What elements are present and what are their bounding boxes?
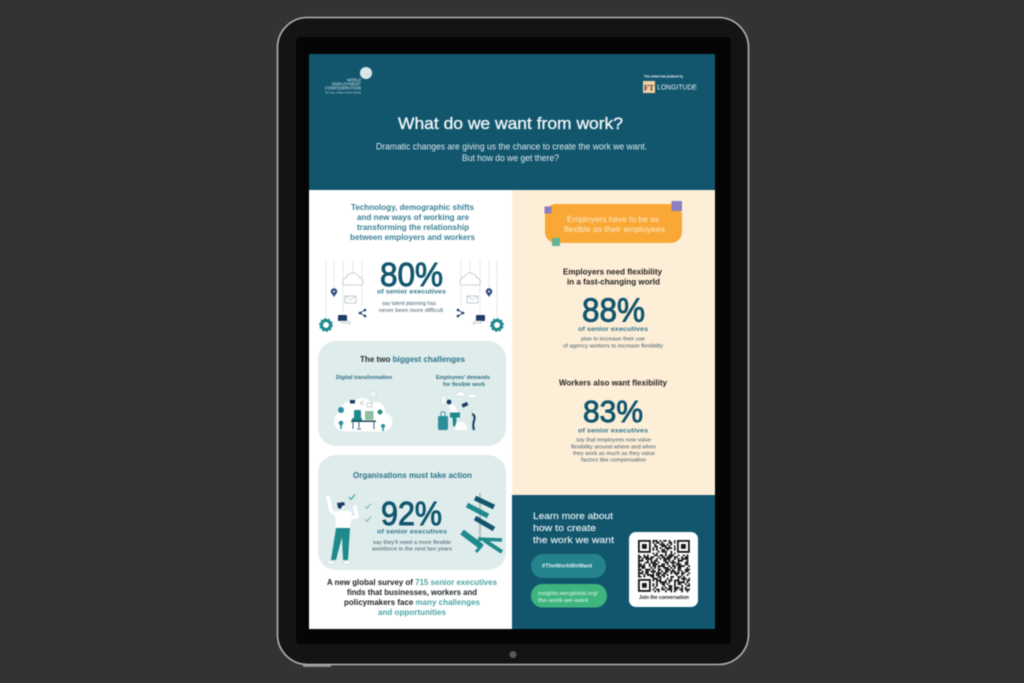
panel: header [309, 54, 715, 190]
illustration: signpost [462, 493, 502, 552]
button: link: insights.wecglobal.org/ [538, 591, 599, 597]
callout: employers flexible: Employers have to be as [567, 215, 659, 224]
button: link: the-work-we-want [538, 598, 589, 604]
button: link [531, 584, 607, 608]
panel heading: Organisations must take action [353, 470, 472, 480]
button: hashtag: #TheWorkWeWant [542, 564, 592, 570]
intro text: and new ways of working are [357, 212, 469, 222]
stat: 88%: of agency workers to increase flexibility [563, 344, 663, 350]
page background [309, 54, 715, 629]
stat: 83%: flexibility around where and when [571, 444, 656, 450]
illustration: remote worker [438, 392, 477, 430]
stat: 80%: never been more difficult [379, 308, 444, 314]
stat: 92%: workforce in the next two years [372, 546, 452, 552]
stat: 92% [372, 495, 452, 552]
logo: World Employment Confederation [325, 67, 372, 94]
title: What do we want from work? [398, 114, 623, 133]
stat: 80% [377, 256, 446, 314]
logo: World Employment Confederation: The Voice of Ways to Work Globally [325, 90, 361, 94]
subtitle: Dramatic changes are giving us the chance to create the work we want. [376, 142, 647, 152]
illustration: cheering person [327, 497, 357, 564]
logo: World Employment Confederation: EMPLOYMENT [332, 82, 361, 86]
tablet device frame [278, 18, 748, 667]
stat: 80%: of senior executives [377, 288, 446, 296]
QR caption: Join the conversation [639, 595, 689, 601]
heading: employers need flexibility: in a fast-changing world [567, 278, 660, 286]
logo: FT Longitude: This content was produced by [644, 74, 684, 78]
heading: workers also want flexibility: Workers also want flexibility [559, 378, 667, 388]
logo: World Employment Confederation: CONFEDERATION [325, 86, 361, 90]
intro text: Technology, demographic shifts [351, 202, 474, 212]
stat: 88%: of senior executives [578, 326, 648, 333]
icon: check marks [349, 494, 371, 522]
stat: 80%: 80% [380, 256, 443, 293]
label: digital transformation: Digital transformation [336, 375, 393, 381]
stat: 83%: of senior executives [578, 428, 648, 434]
QR code [638, 540, 690, 592]
closing text: and opportunities [378, 607, 446, 617]
panel: two biggest challenges [318, 341, 506, 446]
icons: hanging tech icons right [457, 260, 503, 331]
logo: FT Longitude: FT [644, 84, 655, 92]
stat: 83%: 83% [583, 394, 643, 429]
label: flexible work demands: for flexible work [443, 382, 486, 388]
stat: 88%: 88% [582, 292, 645, 328]
logo: FT Longitude: LONGITUDE [657, 84, 697, 92]
intro text: between employers and workers [350, 232, 475, 242]
stat: 80%: say talent planning has [382, 301, 436, 307]
call to action text: Learn more about [533, 511, 613, 522]
illustration: desk in cloud [334, 390, 392, 432]
logo: FT Longitude [643, 74, 697, 93]
stat: 88%: plan to increase their use [581, 336, 645, 342]
QR code card [629, 532, 698, 607]
heading: employers need flexibility: Employers need flexibility [563, 268, 662, 276]
heading: employers need flexibility [563, 268, 662, 286]
icons: hanging tech icons left [320, 260, 366, 331]
stat: 88% [563, 292, 663, 350]
panel heading: The two biggest challenges [360, 355, 466, 364]
label: flexible work demands [436, 375, 490, 388]
stat: 83%: say that employees now value [576, 438, 651, 444]
closing text: policymakers face many challenges [344, 597, 480, 607]
stat: 83%: factors like compensation [581, 458, 646, 464]
closing text: A new global survey of 715 senior executives [327, 577, 497, 587]
call to action text: how to create [533, 523, 596, 534]
callout: employers flexible: flexible as their employees [564, 225, 665, 234]
subtitle [376, 142, 647, 163]
call to action text [533, 511, 614, 546]
subtitle: But how do we get there? [462, 153, 559, 163]
intro text: transforming the relationship [357, 222, 469, 232]
button: hashtag [531, 554, 606, 578]
stat: 92%: of senior executives [377, 528, 447, 536]
stat: 92%: say they'll need a more flexible [373, 540, 451, 546]
callout: employers flexible [544, 201, 682, 246]
stat: 92%: 92% [381, 495, 442, 532]
intro text [350, 202, 475, 242]
panel: organisations must take action [318, 455, 506, 570]
closing text: finds that businesses, workers and [347, 587, 477, 597]
stat: 83% [571, 394, 656, 464]
label: flexible work demands: Employees' demands [436, 375, 490, 381]
stat: 83%: they work as much as they value [573, 451, 655, 457]
closing text [327, 577, 497, 617]
call to action text: the work we want [533, 535, 614, 546]
logo: World Employment Confederation: WORLD [347, 78, 361, 82]
